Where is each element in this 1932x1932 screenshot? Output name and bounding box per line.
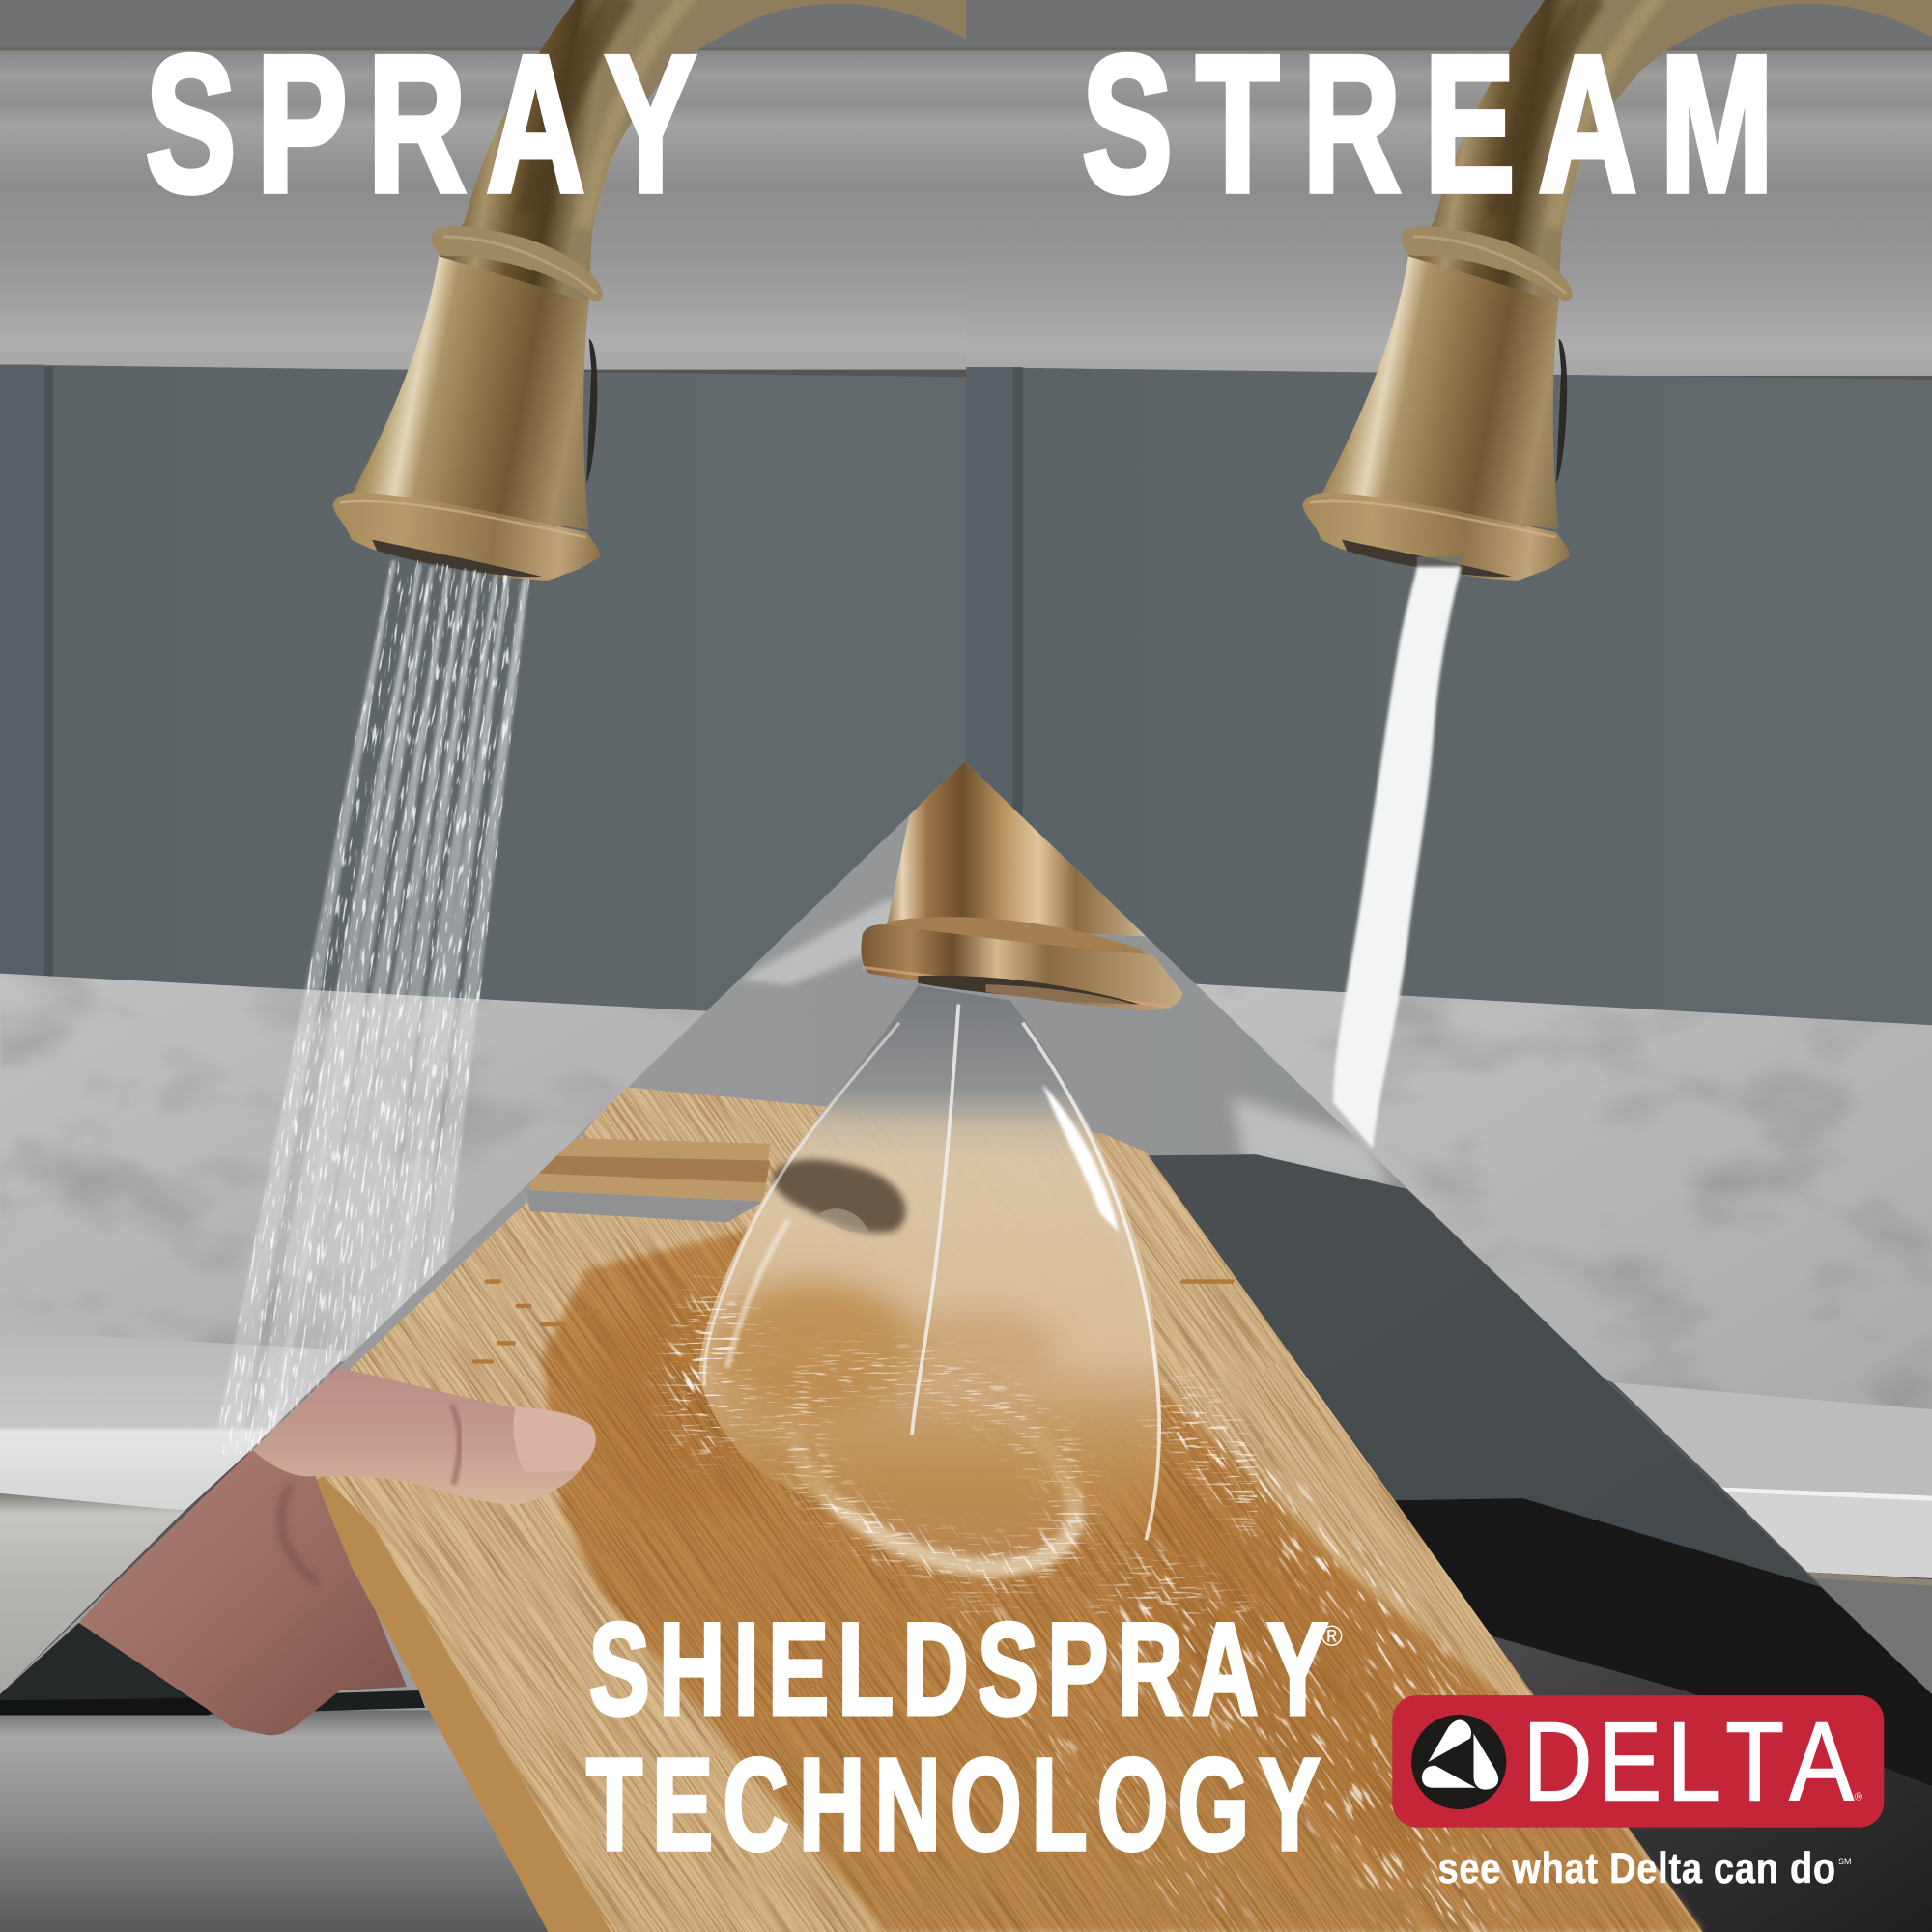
nozzle head xyxy=(861,761,1182,1010)
heading: stream: STREAM xyxy=(1082,15,1797,233)
heading: shieldspray technology: TECHNOLOGY xyxy=(586,1731,1330,1878)
water droplets on board xyxy=(471,1264,1534,1932)
panel: shieldspray center scene xyxy=(0,761,1932,1932)
icon: delta emblem xyxy=(1411,1715,1506,1809)
hand holding the board xyxy=(79,1368,596,1735)
illustration: spray water xyxy=(212,554,532,1454)
tagline: SM xyxy=(1838,1857,1851,1866)
heading: spray: SPRAY xyxy=(146,15,716,233)
illustration: spray faucet xyxy=(332,0,974,581)
tagline: see what Delta can do xyxy=(1438,1843,1836,1892)
wet ring on board xyxy=(785,1418,1088,1582)
panel: spray background xyxy=(0,0,966,1694)
water highlights xyxy=(704,1005,1159,1540)
heading: shieldspray technology: ® xyxy=(1321,1620,1343,1653)
cutting board xyxy=(308,1087,1703,1932)
dark countertop xyxy=(1133,1154,1932,1932)
logo: delta: ® xyxy=(1855,1792,1863,1804)
heading: shieldspray technology: SHIELDSPRAY xyxy=(589,1595,1337,1742)
illustration: stream water xyxy=(1333,557,1462,1149)
heading: shieldspray technology xyxy=(586,1595,1343,1878)
panel: stream background xyxy=(966,0,1932,1700)
splash specks inside shield xyxy=(616,1171,1257,1614)
logo: delta: DELTA xyxy=(1523,1698,1859,1824)
logo: delta xyxy=(1392,1695,1884,1828)
sink and black counter at left xyxy=(0,1623,591,1932)
illustration: stream faucet xyxy=(1302,0,1932,581)
shield of water xyxy=(616,985,1257,1614)
